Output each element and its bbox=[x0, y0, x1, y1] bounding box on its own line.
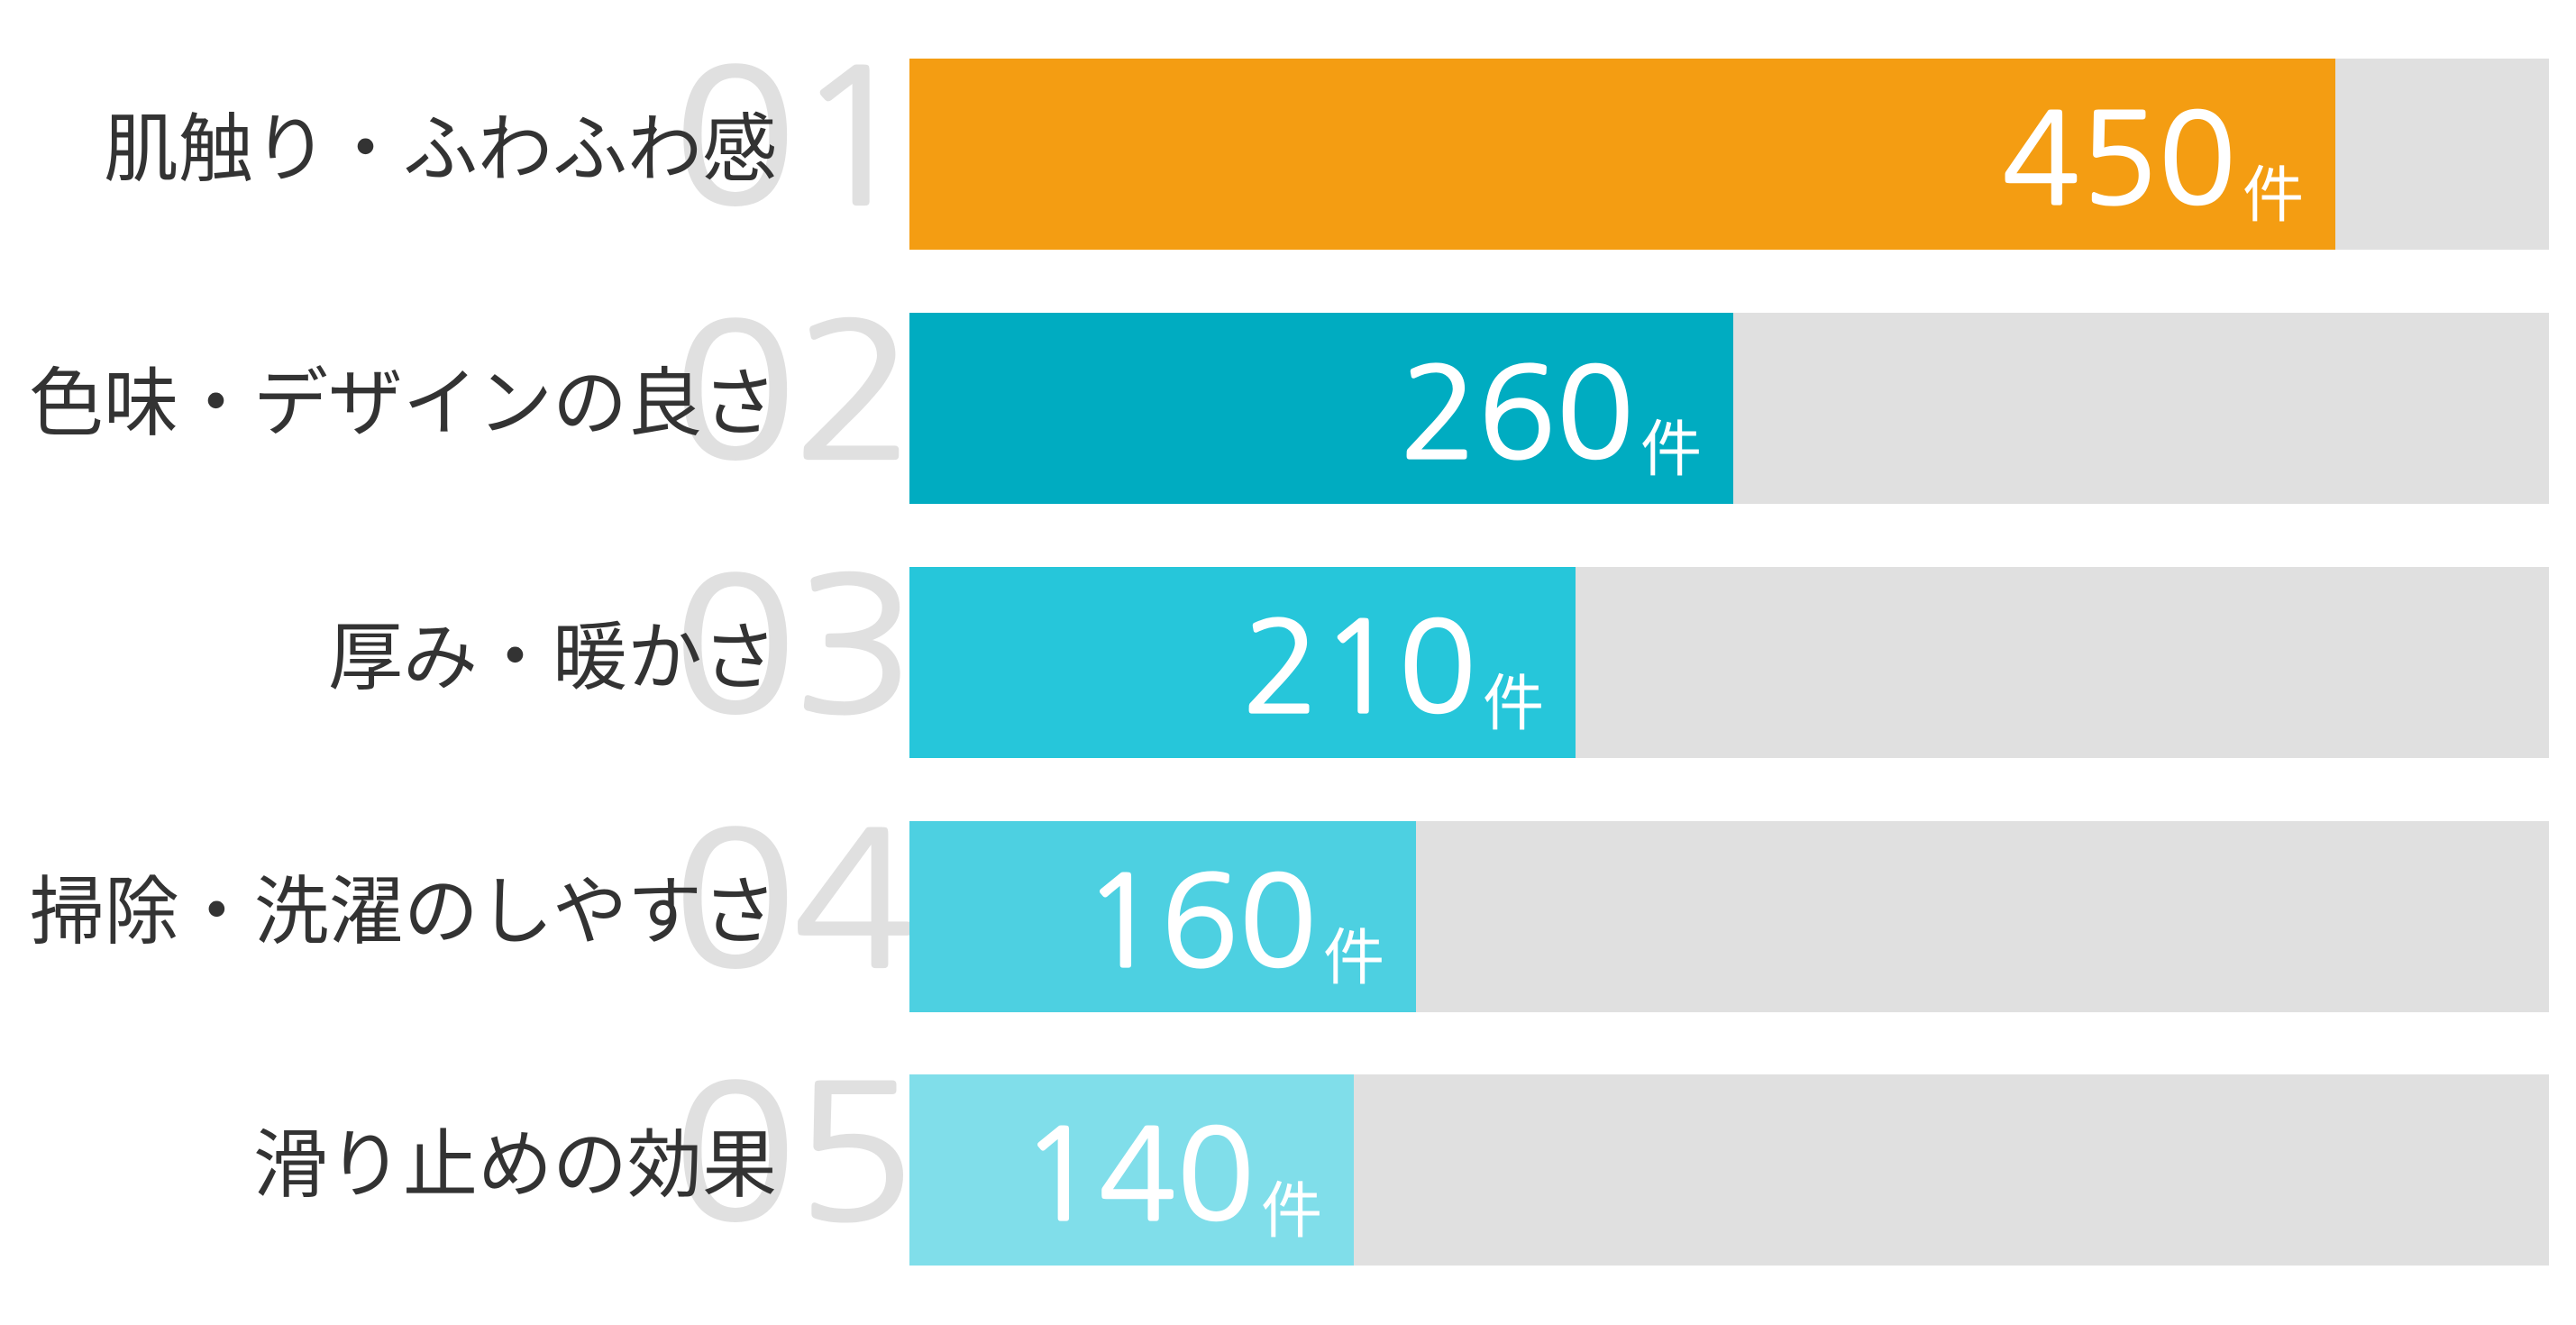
unit 2: 件 bbox=[1640, 416, 1702, 484]
value 450: 450 bbox=[2002, 97, 2236, 223]
value 140: 140 bbox=[1020, 1113, 1255, 1238]
label 1: 肌触り・ふわふわ感 bbox=[104, 107, 777, 191]
track 5 bbox=[909, 1074, 2549, 1266]
track 4 bbox=[909, 821, 2549, 1012]
value 160: 160 bbox=[1082, 860, 1317, 985]
rank number 01 bbox=[672, 45, 917, 231]
row 3: 厚み・暖かさ bbox=[328, 553, 2549, 758]
rank number 03 bbox=[672, 553, 917, 739]
row 4: 掃除・洗濯のしやすさ bbox=[30, 808, 2549, 1012]
rank number 01: 1 bbox=[792, 45, 917, 231]
bar 1 bbox=[909, 59, 2335, 250]
rank number 05: 0 bbox=[672, 1061, 797, 1247]
rank number 04: 4 bbox=[792, 808, 917, 993]
rank number 03: 0 bbox=[672, 553, 797, 739]
unit 5: 件 bbox=[1261, 1177, 1322, 1246]
rank number 04: 0 bbox=[672, 808, 797, 993]
rank number 05 bbox=[672, 1061, 917, 1247]
rank number 03: 3 bbox=[792, 553, 917, 739]
rank number 04 bbox=[672, 808, 917, 993]
bar 2 bbox=[909, 313, 1733, 504]
row 2: 色味・デザインの良さ bbox=[29, 299, 2549, 504]
label 3: 厚み・暖かさ bbox=[328, 616, 777, 699]
unit 4: 件 bbox=[1323, 924, 1384, 992]
rank number 02: 0 bbox=[672, 299, 797, 485]
rank number 02: 2 bbox=[792, 299, 917, 485]
value 260: 260 bbox=[1400, 352, 1634, 477]
row 1: 肌触り・ふわふわ感 bbox=[104, 45, 2549, 250]
label 4: 掃除・洗濯のしやすさ bbox=[30, 870, 777, 954]
rank number 05: 5 bbox=[792, 1061, 917, 1247]
label 5: 滑り止めの効果 bbox=[253, 1123, 777, 1207]
row 5: 滑り止めの効果 bbox=[253, 1061, 2549, 1266]
track 1 bbox=[909, 59, 2549, 250]
track 2 bbox=[909, 313, 2549, 504]
label 2: 色味・デザインの良さ bbox=[29, 361, 777, 445]
bar 3 bbox=[909, 567, 1576, 758]
track 3 bbox=[909, 567, 2549, 758]
unit 1: 件 bbox=[2243, 161, 2304, 230]
value 210: 210 bbox=[1242, 606, 1476, 731]
rank number 01: 0 bbox=[672, 45, 797, 231]
unit 3: 件 bbox=[1483, 670, 1544, 738]
bar 5 bbox=[909, 1074, 1354, 1266]
bar 4 bbox=[909, 821, 1416, 1012]
rank number 02 bbox=[672, 299, 917, 485]
